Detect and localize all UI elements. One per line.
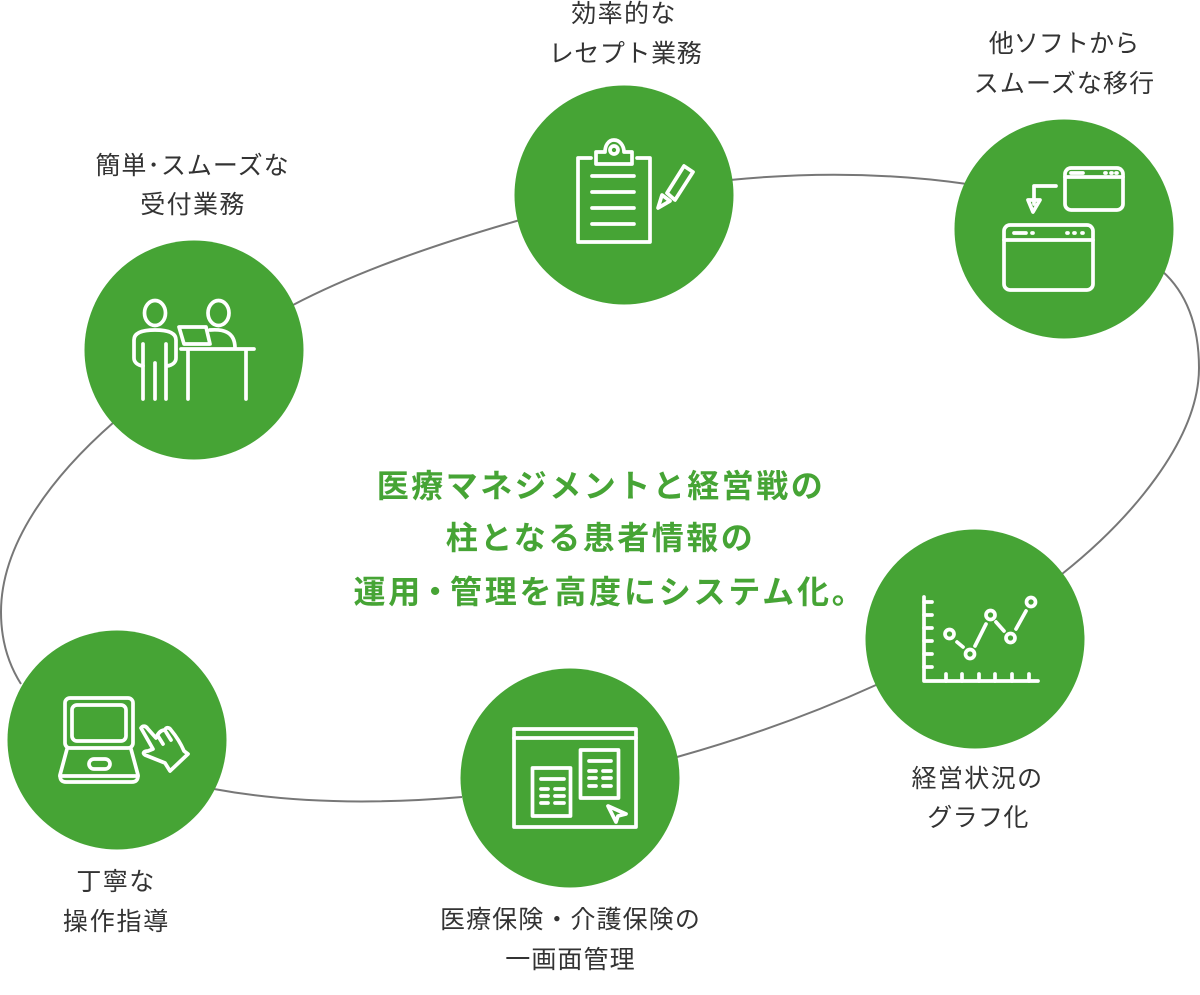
icon: clipboard and pencil [578, 140, 693, 242]
label: migration: 他ソフトから [989, 30, 1139, 58]
label: receipt [549, 0, 702, 68]
label: reception [95, 152, 290, 219]
connecting loop line [1, 175, 1199, 802]
node: insurance [440, 668, 701, 974]
icon: window with sheets [514, 729, 636, 827]
label: receipt: レセプト業務 [549, 40, 702, 68]
node: graph [866, 530, 1084, 832]
label: insurance: 医療保険・介護保険の [440, 906, 701, 934]
central heading: 運用・管理を高度にシステム化。 [354, 574, 867, 610]
circle: receipt [514, 86, 734, 304]
circle: reception [84, 240, 304, 460]
node: instruction [8, 630, 226, 936]
label: insurance [440, 906, 701, 974]
central heading [354, 468, 867, 610]
node: reception [84, 152, 304, 460]
label: migration: スムーズな移行 [974, 70, 1155, 98]
label: reception: 簡単･スムーズな [95, 152, 290, 180]
icon: line chart [924, 597, 1038, 681]
label: instruction [63, 868, 170, 936]
circle: graph [866, 530, 1084, 748]
icon: two people at desk [134, 300, 254, 399]
label: receipt: 効率的な [571, 0, 677, 28]
label: instruction: 操作指導 [63, 908, 170, 936]
circle: instruction [8, 630, 226, 850]
label: instruction: 丁寧な [76, 868, 156, 896]
icon: window transfer [1004, 168, 1123, 290]
circle: insurance [460, 668, 680, 888]
node: migration [954, 30, 1174, 338]
icon: laptop and hand [60, 698, 188, 782]
label: insurance: 一画面管理 [505, 946, 636, 974]
label: graph: グラフ化 [927, 804, 1029, 832]
circle: migration [954, 120, 1174, 338]
central heading: 医療マネジメントと経営戦の [377, 468, 825, 504]
label: reception: 受付業務 [140, 191, 246, 219]
central heading: 柱となる患者情報の [446, 520, 755, 556]
node: receipt [514, 0, 734, 304]
label: graph: 経営状況の [911, 765, 1044, 793]
label: migration [974, 30, 1155, 98]
label: graph [911, 765, 1044, 832]
